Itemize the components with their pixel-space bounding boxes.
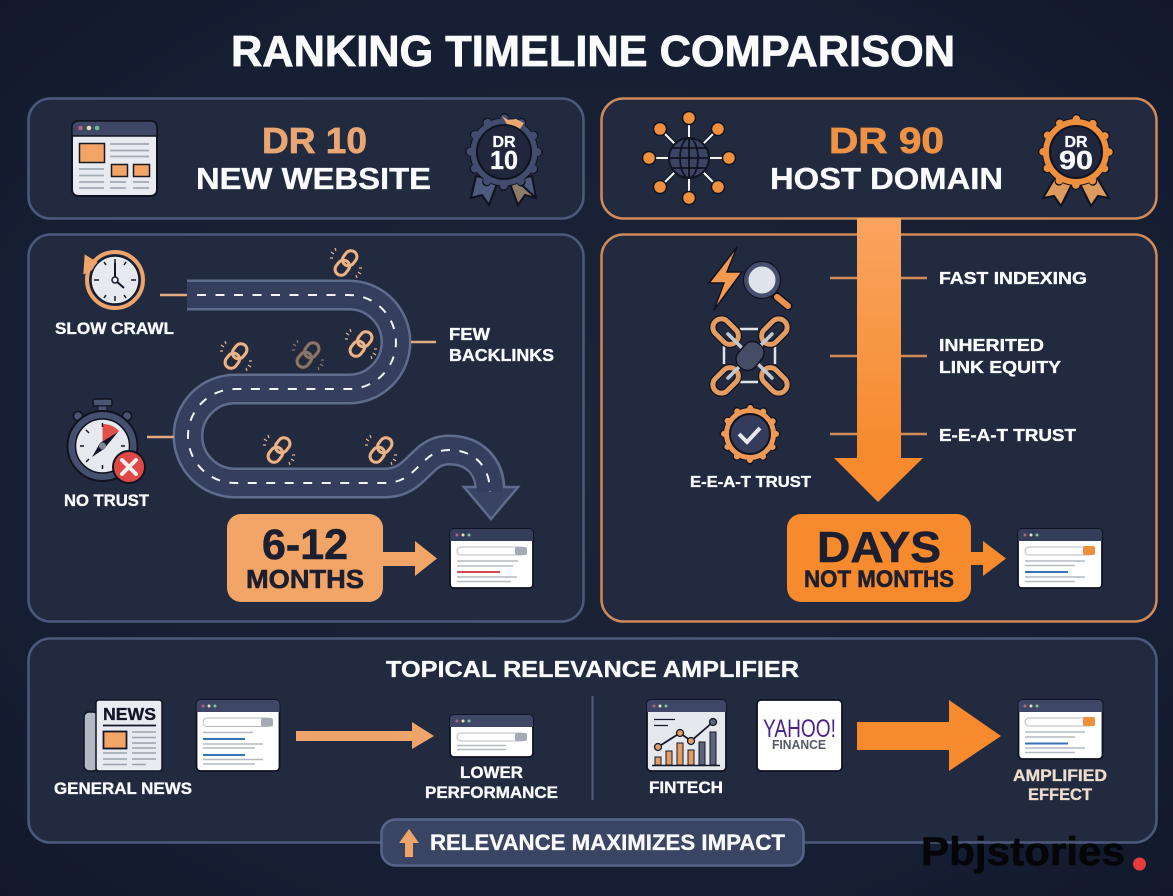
icon: broken link lower left [263,435,295,465]
label: lower performance [425,763,558,802]
icon: broken link right [345,329,377,359]
icon: newspaper [84,700,162,771]
connectors: benefit ticks [830,278,927,434]
callout: days not months: DAYS [817,523,941,572]
icon: stopwatch no trust [68,399,145,483]
icon: up arrow [399,829,419,857]
label: lower performance: PERFORMANCE [425,783,558,802]
label: few backlinks: BACKLINKS [449,345,554,365]
label: fast indexing: FAST INDEXING [939,268,1087,288]
label: inherited link equity [939,335,1061,377]
connector: few backlinks [411,341,436,343]
label: inherited link equity: INHERITED [939,335,1044,355]
icon: slow crawl clock [85,252,143,308]
heading: new website: NEW WEBSITE [196,161,431,196]
label: general news: GENERAL NEWS [54,779,192,798]
heading: DR 90: DR 90 [829,120,944,161]
label: no trust: NO TRUST [64,492,149,510]
logo: yahoo finance: YAHOO! [763,715,836,743]
icon: DR 90 badge: DR [1064,134,1088,151]
callout pill: relevance maximizes impact [382,820,804,866]
icon: DR 90 badge: 90 [1059,145,1093,175]
icon: E-E-A-T check badge [723,407,777,461]
icon: newspaper: NEWS [103,704,156,724]
panel: DR 10 slow path [28,234,584,622]
callout: 6-12 months: 6-12 [262,521,348,569]
arrow: lower flow [296,722,434,749]
panel: DR 90 fast path [602,218,1156,622]
arrow: days to results [971,541,1006,576]
callout: days not months [787,514,971,602]
watermark: Pbjstories: Pbjstories [921,830,1125,874]
label: E-E-A-T trust icon caption: E-E-A-T TRUST [690,474,811,491]
icon: broken link left [220,341,252,371]
icon: DR 90 badge [1042,118,1110,206]
icon: globe network [642,112,736,204]
arrow: months to results [383,541,437,576]
title: RANKING TIMELINE COMPARISON [231,27,955,76]
icon: search results window red [450,529,533,588]
label: amplified effect: AMPLIFIED [1013,766,1107,785]
icon: DR 10 badge: 10 [490,145,518,175]
panel: topical relevance amplifier [28,638,1156,842]
icon: fintech chart window [647,700,726,771]
icon: broken link top [330,248,362,278]
divider [592,696,594,800]
label: few backlinks: FEW [449,324,490,344]
connector: no trust [147,436,174,438]
icon: lightning and magnifier [709,247,788,310]
label: fintech: FINTECH [649,778,723,797]
icon: lower performance window [450,715,533,757]
icon: crossed chains [709,315,791,397]
icon: DR 10 badge [470,116,538,205]
logo: yahoo finance [757,700,842,771]
panel: DR 10 new website header [28,98,584,218]
label: amplified effect [1013,766,1107,804]
winding road arrow [187,295,518,519]
icon: broken link lower right [365,435,397,465]
heading: topical relevance amplifier: TOPICAL RELEVANCE AMPLIFIER [386,656,799,682]
icon: search results window orange [1018,529,1102,588]
arrow: big downward authority arrow [834,218,923,502]
icon: general news results window [196,700,280,771]
label: amplified effect: EFFECT [1028,785,1093,804]
callout: days not months: NOT MONTHS [804,566,954,593]
text: relevance maximizes impact: RELEVANCE MAXIMIZES IMPACT [430,830,786,855]
callout: 6-12 months [227,514,383,602]
label: slow crawl: SLOW CRAWL [55,320,174,338]
icon: broken link faded [292,340,324,370]
arrow: amplified flow [857,700,1001,771]
panel: DR 90 host domain header [602,98,1156,218]
label: inherited link equity: LINK EQUITY [939,357,1061,377]
icon: website window [72,121,157,196]
label: E-E-A-T trust: E-E-A-T TRUST [939,425,1076,445]
callout: 6-12 months: MONTHS [246,564,364,594]
label: few backlinks [449,324,554,365]
label: lower performance: LOWER [460,763,523,782]
icon: amplified effect window [1018,700,1102,759]
icon: DR 10 badge: DR [492,134,516,151]
connector: slow crawl [160,294,187,296]
logo: yahoo finance: FINANCE [772,738,826,752]
heading: host domain: HOST DOMAIN [770,161,1003,196]
heading: DR 10: DR 10 [262,120,367,161]
